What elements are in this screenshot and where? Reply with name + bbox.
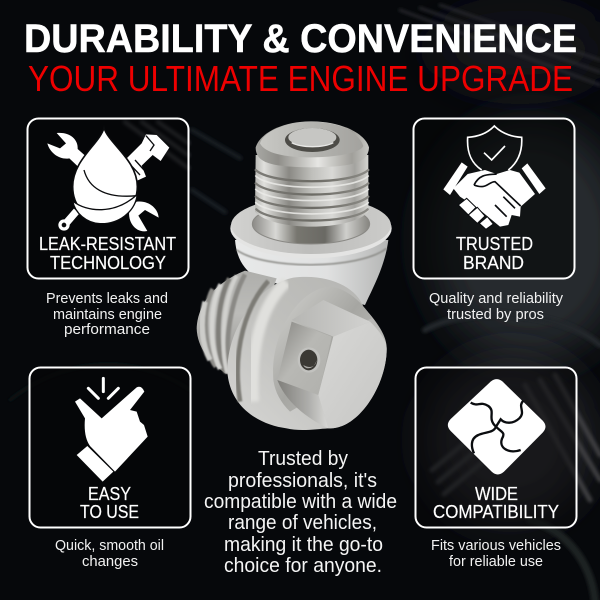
title: DURABILITY & CONVENIENCE xyxy=(24,17,577,61)
description: trusted brand: trusted by pros xyxy=(447,307,544,323)
description: leak-resistant: performance xyxy=(64,322,150,338)
icon: snapping fingers xyxy=(75,378,148,482)
heading xyxy=(39,234,176,273)
central paragraph: choice for anyone. xyxy=(224,554,382,577)
heading xyxy=(80,484,139,522)
lower drain plug xyxy=(197,271,387,430)
description: easy to use xyxy=(55,538,164,570)
icon: puzzle pieces xyxy=(448,379,545,474)
description: easy to use: Quick, smooth oil xyxy=(55,538,164,554)
central paragraph xyxy=(204,447,397,577)
central paragraph: Trusted by xyxy=(258,447,349,470)
central paragraph: compatible with a wide xyxy=(204,490,397,513)
central paragraph: making it the go-to xyxy=(224,533,383,556)
panel: trusted brand xyxy=(414,118,574,278)
heading: TRUSTED xyxy=(456,234,533,254)
panel: easy to use xyxy=(30,368,190,528)
description: wide compatibility: Fits various vehicles xyxy=(431,538,561,554)
panel: leak-resistant technology xyxy=(28,118,188,278)
product: two silver drain plugs xyxy=(197,121,392,430)
description: easy to use: changes xyxy=(82,554,138,570)
panel: wide compatibility xyxy=(416,368,576,528)
heading xyxy=(456,234,533,273)
central paragraph: professionals, it's xyxy=(228,469,377,492)
description: leak-resistant xyxy=(46,291,168,338)
description: wide compatibility xyxy=(431,538,561,570)
heading: LEAK-RESISTANT xyxy=(39,234,176,254)
heading: EASY xyxy=(88,484,131,504)
description: wide compatibility: for reliable use xyxy=(449,554,543,570)
heading: COMPATIBILITY xyxy=(433,502,559,522)
heading: TECHNOLOGY xyxy=(50,253,166,273)
description: trusted brand: Quality and reliability xyxy=(429,291,564,307)
description: trusted brand xyxy=(429,291,564,323)
heading: BRAND xyxy=(463,253,524,273)
icon: oil drop with wrenches xyxy=(47,128,169,231)
description: leak-resistant: Prevents leaks and xyxy=(46,291,168,307)
upper drain plug xyxy=(230,121,392,305)
heading xyxy=(433,484,559,522)
heading: TO USE xyxy=(80,502,139,522)
heading: WIDE xyxy=(475,484,518,504)
description: leak-resistant: maintains engine xyxy=(53,307,162,323)
central paragraph: range of vehicles, xyxy=(228,511,377,534)
icon: shield and handshake xyxy=(443,126,546,229)
